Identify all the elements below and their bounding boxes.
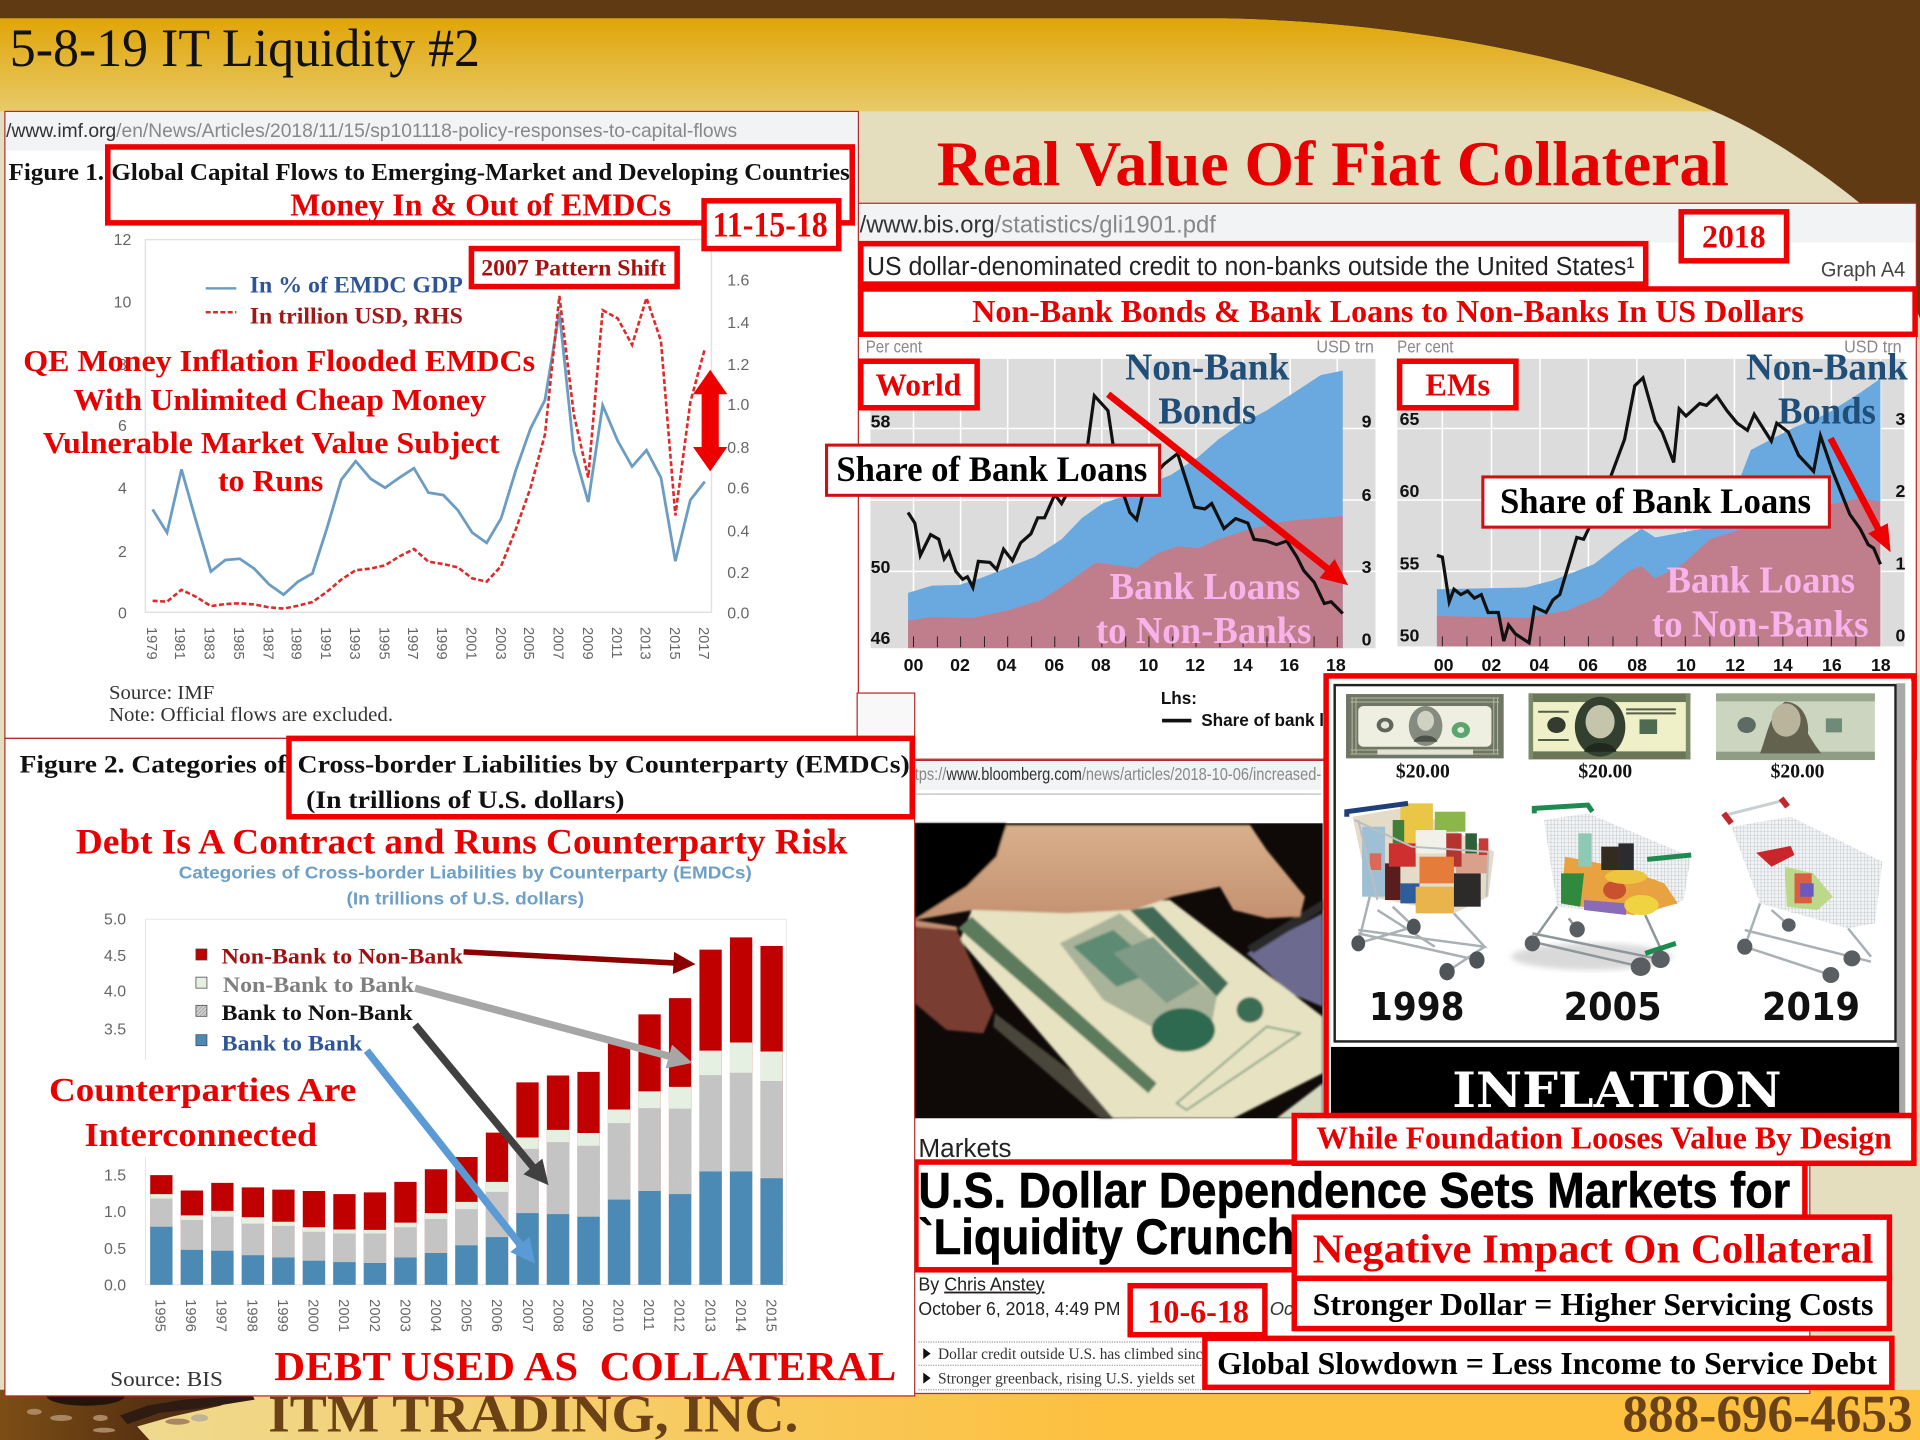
callout: 2007 pattern shift (471, 249, 677, 287)
callout: date 10-6-18 (1130, 1286, 1265, 1335)
callout: non-bank bonds and bank loans (861, 289, 1915, 334)
callout: QE money inflation text (23, 344, 535, 498)
bar chart year labels: 1995 (152, 1299, 168, 1332)
callout: counterparties (7, 1060, 446, 1157)
source note (109, 683, 393, 726)
callout: date 11-15-18: 11-15-18 (713, 204, 828, 244)
bar chart year labels: 2000 (305, 1299, 321, 1332)
labels: World non-bank bonds: Bonds (1158, 391, 1256, 433)
chart axis labels: 1 (1896, 553, 1906, 573)
labels: World bank loans: Bank Loans (1109, 566, 1300, 608)
left axis labels: 4 (118, 480, 127, 497)
chart axis labels: 0 (1896, 626, 1906, 646)
right axis labels: 1.2 (727, 357, 750, 374)
year axis labels: 2007 (549, 627, 565, 660)
section label: Markets (918, 1135, 1011, 1163)
year axis labels: 2009 (579, 627, 595, 660)
chart axis labels: 04 (997, 655, 1017, 675)
bar chart year labels: 2006 (488, 1299, 504, 1332)
labels: EMs non-bank bonds: Bonds (1778, 391, 1876, 433)
label: World (861, 361, 977, 408)
bar chart legend: Non-Bank to Bank (223, 972, 415, 997)
bar chart y axis: 0.0 (104, 1278, 126, 1295)
callout: foundation loses value (1294, 1116, 1914, 1163)
chart axis labels: 12 (1185, 655, 1205, 675)
panel: Bloomberg article (913, 760, 1810, 1393)
callout: non-bank bonds and bank loans: Non-Bank Bonds & Bank Loans to Non-Banks In US Dollars (972, 294, 1804, 329)
bar chart year labels (152, 1299, 779, 1332)
year axis labels: 1989 (287, 627, 303, 660)
headline box (916, 1162, 1805, 1270)
callout: figure 1 title box: Global Capital Flows to Emerging-Market and Developing Countries (111, 159, 850, 186)
chart legend: In trillion USD, RHS (250, 303, 463, 329)
cart 2005 (1511, 805, 1691, 976)
labels: World bank loans: to Non-Banks (1096, 610, 1311, 652)
cart 2019 (1724, 798, 1882, 983)
headline box: `Liquidity Crunch' (918, 1209, 1305, 1265)
axis units row: USD trn (1844, 337, 1902, 357)
chart axis labels: 2 (1896, 481, 1906, 501)
article bullet points: Stronger greenback, rising U.S. yields set (938, 1371, 1196, 1388)
source: Source: BIS (110, 1367, 223, 1391)
callout: negative impact on collateral (1294, 1217, 1889, 1278)
chart axis labels: 16 (1822, 655, 1842, 675)
callout: figure 1 title box (108, 147, 852, 223)
source note: Source: IMF (109, 683, 214, 704)
chart subtitle: (In trillions of U.S. dollars) (347, 888, 584, 908)
article bullet points: Dollar credit outside U.S. has climbed sinc (938, 1346, 1203, 1363)
bar chart y axis: 1.0 (104, 1204, 126, 1221)
callout: QE money inflation text: With Unlimited Cheap Money (73, 383, 486, 417)
year axis labels: 1993 (346, 627, 362, 660)
labels: EMs non-bank bonds: Non-Bank (1746, 347, 1909, 389)
arrow: EMs bank loan share decline (1831, 438, 1891, 552)
right axis labels: 0.0 (727, 605, 750, 622)
year axis labels: 2017 (695, 627, 711, 660)
chart legend (206, 273, 463, 329)
chart axis labels: 08 (1627, 655, 1647, 675)
chart axis labels: 02 (950, 655, 970, 675)
chart: capital flows lines (145, 240, 711, 612)
inner black frame (1335, 685, 1896, 1041)
right axis labels: 1.4 (727, 315, 750, 332)
inflation banner: INFLATION (1452, 1061, 1782, 1119)
callout: date 2018: 2018 (1702, 219, 1766, 255)
title: 5-8-19 IT Liquidity #2 (10, 18, 480, 78)
callout: stronger dollar (1294, 1278, 1889, 1329)
axis units row: USD trn (1316, 337, 1374, 357)
year axis labels: 2013 (636, 627, 652, 660)
illustrations: dollar bills and carts (1346, 693, 1882, 983)
chart axis labels: 06 (1044, 655, 1064, 675)
callout: stronger dollar: Stronger Dollar = Higher Servicing Costs (1313, 1287, 1873, 1322)
date line: October 6, 2018, 4:49 PM (918, 1298, 1120, 1319)
year axis labels: 1985 (230, 627, 246, 660)
callout: EMs share of bank loans: Share of Bank Loans (1500, 481, 1811, 521)
label: World: World (876, 368, 962, 403)
labels: EMs non-bank bonds (1746, 347, 1909, 433)
bill price labels: $20.00 (1578, 762, 1632, 783)
chart axis labels: 14 (1233, 655, 1253, 675)
icon: telescope and coins corner (0, 1386, 257, 1440)
callout: date 10-6-18: 10-6-18 (1147, 1294, 1249, 1330)
IMF url: /www.imf.org/en/News/Articles/2018/11/15/sp101118-policy-responses-to-capital-flows (6, 120, 737, 142)
chart axis labels: 50 (1400, 626, 1419, 646)
chart subtitle (179, 863, 752, 908)
bar chart year labels: 2005 (458, 1299, 474, 1332)
callout: QE money inflation text: to Runs (218, 464, 323, 498)
arrow: bank to non-bank (415, 1025, 549, 1185)
chart axis labels: 10 (1676, 655, 1696, 675)
bar chart y axis: 0.5 (104, 1241, 126, 1258)
panel: BIS dollar credit charts (857, 203, 1916, 759)
right axis labels: 0.4 (727, 523, 750, 540)
year axis labels: 1991 (317, 627, 333, 660)
right axis labels: 0.2 (727, 565, 750, 582)
year axis labels: 1979 (143, 627, 159, 660)
year axis labels: 1983 (200, 627, 216, 660)
right axis labels: 0.6 (727, 480, 750, 497)
chart axis labels: 08 (1091, 655, 1111, 675)
chart legend fragment: Share of bank l (1201, 710, 1324, 730)
year labels: 2005 (1564, 985, 1662, 1029)
bar chart y axis: 4.0 (104, 984, 126, 1001)
year labels: 2019 (1762, 985, 1860, 1029)
chart legend fragment: Lhs: (1161, 688, 1197, 708)
right axis labels: 1.6 (727, 272, 750, 289)
chart axis labels: 18 (1871, 655, 1891, 675)
chart axis labels: 0 (1362, 629, 1372, 649)
byline: By Chris Anstey (918, 1274, 1045, 1295)
labels: World bank loans (1096, 566, 1311, 652)
chart axis labels: 02 (1482, 655, 1501, 675)
bar chart year labels: 1999 (274, 1299, 290, 1332)
labels: EMs bank loans: Bank Loans (1667, 560, 1855, 602)
chart: World (871, 359, 1375, 648)
cart 1998 (1347, 803, 1494, 980)
year axis labels: 1995 (376, 627, 392, 660)
left axis labels: 0 (118, 605, 127, 622)
year axis labels: 2011 (608, 627, 624, 659)
bar chart y axis: 4.5 (104, 948, 126, 965)
inflation banner (1331, 1047, 1899, 1119)
chart axis labels: 6 (1362, 485, 1372, 505)
left axis labels: 8 (118, 357, 127, 374)
chart axis labels: 16 (1280, 655, 1299, 675)
left axis labels: 12 (114, 232, 131, 249)
callout: QE money inflation text: Vulnerable Market Value Subject (43, 426, 500, 460)
year axis labels: 1987 (259, 627, 275, 660)
article bullet points (918, 1342, 1203, 1390)
bill 1998 (1346, 694, 1504, 758)
bill price labels (1396, 762, 1825, 783)
bar chart legend: Bank to Bank (222, 1031, 363, 1056)
panel: Figure 2 cross-border liabilities (5, 693, 915, 1396)
chart axis labels: 65 (1400, 409, 1419, 429)
bill price labels: $20.00 (1771, 762, 1825, 783)
bar chart y axis: 5.0 (104, 911, 126, 928)
labels: EMs bank loans (1652, 560, 1869, 646)
bar chart legend: Bank to Non-Bank (222, 1000, 413, 1025)
chart axis labels: 9 (1362, 411, 1372, 431)
bar chart year labels: 2015 (763, 1299, 779, 1332)
year axis labels (143, 627, 711, 660)
callout: global slowdown (1205, 1338, 1892, 1387)
chart legend fragment (1161, 688, 1324, 730)
chart axis labels: 55 (1400, 553, 1419, 573)
bar chart year labels: 2011 (640, 1299, 656, 1331)
panel: IMF global capital flows chart (5, 111, 858, 738)
callout: debt used as collateral: DEBT USED AS COLLATERAL (274, 1344, 896, 1390)
right axis labels: 1.0 (727, 397, 750, 414)
source note: Note: Official flows are excluded. (109, 705, 393, 726)
bar chart year labels: 2012 (671, 1299, 687, 1332)
bar chart year labels: 2004 (427, 1299, 443, 1332)
chart axis labels: 00 (1434, 655, 1454, 675)
bill price labels: $20.00 (1396, 762, 1450, 783)
year axis labels: 2005 (520, 627, 536, 660)
label: EMs (1400, 361, 1516, 408)
bar chart year labels: 2014 (732, 1299, 748, 1332)
bar chart year labels: 1997 (213, 1299, 229, 1332)
chart axis labels: 10 (1139, 655, 1159, 675)
year axis labels: 2003 (492, 627, 508, 660)
photo: hand holding dollar bills (914, 823, 1323, 1118)
callout: negative impact on collateral: Negative Impact On Collateral (1313, 1226, 1873, 1272)
bar chart year labels: 1996 (182, 1299, 198, 1332)
callout: 2007 pattern shift: 2007 Pattern Shift (481, 256, 666, 282)
left axis labels: 10 (114, 294, 131, 311)
year axis labels: 1997 (404, 627, 420, 660)
bar chart year labels: 2007 (519, 1299, 535, 1332)
thin frame fragment (857, 693, 915, 738)
axis units row: Per cent (866, 337, 922, 357)
bar chart y axis: 1.5 (104, 1167, 126, 1184)
headline box: U.S. Dollar Dependence Sets Markets for (918, 1162, 1790, 1218)
axis units row: Per cent (1397, 337, 1454, 357)
labels: World non-bank bonds (1125, 347, 1290, 433)
chart axis labels: 04 (1529, 655, 1549, 675)
arrow: non-bank to bank (415, 988, 692, 1068)
right axis labels: 0.8 (727, 440, 750, 457)
chart axis labels (871, 409, 1906, 675)
year axis labels: 1981 (171, 627, 187, 660)
bar chart legend (196, 944, 464, 1056)
chart axis labels: 14 (1773, 655, 1793, 675)
bar chart y axis: 3.5 (104, 1022, 126, 1039)
chart axis labels: 58 (871, 411, 890, 431)
arrow: double-headed volatility (693, 370, 727, 471)
year labels (1369, 985, 1860, 1029)
figure 2 title box: (In trillions of U.S. dollars) (306, 785, 624, 814)
figure 1 label: Figure 1. (9, 159, 104, 186)
chart axis labels: 06 (1578, 655, 1598, 675)
left axis labels: 2 (118, 544, 127, 561)
bar chart year labels: 2009 (579, 1299, 595, 1332)
bar chart year labels: 2001 (335, 1299, 351, 1332)
axis units row (866, 337, 1902, 357)
date fragment: Oc (1270, 1298, 1293, 1319)
bar chart year labels: 1998 (243, 1299, 259, 1332)
chart: stacked bars (146, 919, 786, 1285)
chart axis labels: 46 (871, 628, 890, 648)
bar chart year labels: 2003 (396, 1299, 412, 1332)
callout: World share of bank loans: Share of Bank Loans (836, 449, 1147, 489)
chart axis labels: 3 (1362, 557, 1372, 577)
labels: EMs bank loans: to Non-Banks (1652, 604, 1869, 646)
figure 2 title box (289, 738, 912, 817)
heading: debt is a contract: Debt Is A Contract and Runs Counterparty Risk (76, 821, 848, 861)
year axis labels: 2015 (666, 627, 682, 660)
callout: BIS chart title: US dollar-denominated credit to non-banks outside the United States¹ (867, 253, 1635, 281)
callout: QE money inflation text: QE Money Inflation Flooded EMDCs (23, 344, 535, 378)
arrow: World bank loan share decline (1108, 394, 1348, 585)
chart axis labels: 12 (1725, 655, 1745, 675)
labels: World non-bank bonds: Non-Bank (1125, 347, 1290, 389)
callout: figure 1 title box: Money In & Out of EMDCs (290, 188, 671, 223)
bar chart year labels: 2013 (701, 1299, 717, 1332)
chart axis labels: 60 (1400, 481, 1419, 501)
callout: counterparties: Counterparties Are (49, 1071, 356, 1109)
panel: inflation shopping carts (1326, 676, 1914, 1129)
BIS url: /www.bis.org/statistics/gli1901.pdf (860, 212, 1216, 239)
year axis labels: 2001 (463, 627, 479, 660)
callout: global slowdown: Global Slowdown = Less Income to Service Debt (1217, 1346, 1878, 1381)
label: EMs: EMs (1425, 368, 1490, 403)
bill 2019 (1716, 693, 1875, 760)
chart legend: In % of EMDC GDP (250, 273, 463, 299)
right axis labels (727, 272, 750, 622)
callout: date 2018 (1681, 212, 1787, 261)
Bloomberg url: tps://www.bloomberg.com/news/articles/2018-10-06/increased- (915, 764, 1321, 784)
bar chart legend: Non-Bank to Non-Bank (222, 944, 464, 969)
bar chart year labels: 2002 (366, 1299, 382, 1332)
bar chart year labels: 2008 (549, 1299, 565, 1332)
arrow: non-bank to non-bank (464, 952, 696, 974)
chart axis labels: 3 (1896, 409, 1906, 429)
year labels: 1998 (1369, 985, 1464, 1029)
bar chart y axis (104, 911, 126, 1295)
arrow: bank to bank (367, 1051, 535, 1264)
chart axis labels: 00 (904, 655, 923, 675)
callout: foundation loses value: While Foundation Looses Value By Design (1316, 1121, 1892, 1156)
figure 2 label: Figure 2. Categories of (20, 750, 287, 779)
chart: EMs (1397, 359, 1904, 646)
left axis labels (114, 232, 131, 622)
left axis labels: 6 (118, 418, 127, 435)
graph number: Graph A4 (1821, 259, 1905, 282)
heading: Real Value Of Fiat Collateral: Real Value Of Fiat Collateral (937, 128, 1729, 199)
year axis labels: 1999 (433, 627, 449, 660)
chart axis labels: 50 (871, 557, 890, 577)
bill 2005 (1529, 693, 1690, 759)
callout: BIS chart title (861, 244, 1646, 284)
callout: counterparties: Interconnected (84, 1116, 317, 1154)
chart axis labels: 18 (1326, 655, 1346, 675)
bar chart year labels: 2010 (609, 1299, 625, 1332)
figure 2 title box: Cross-border Liabilities by Counterparty (EMDCs) (298, 750, 910, 779)
chart subtitle: Categories of Cross-border Liabilities by Counterparty (EMDCs) (179, 863, 752, 883)
